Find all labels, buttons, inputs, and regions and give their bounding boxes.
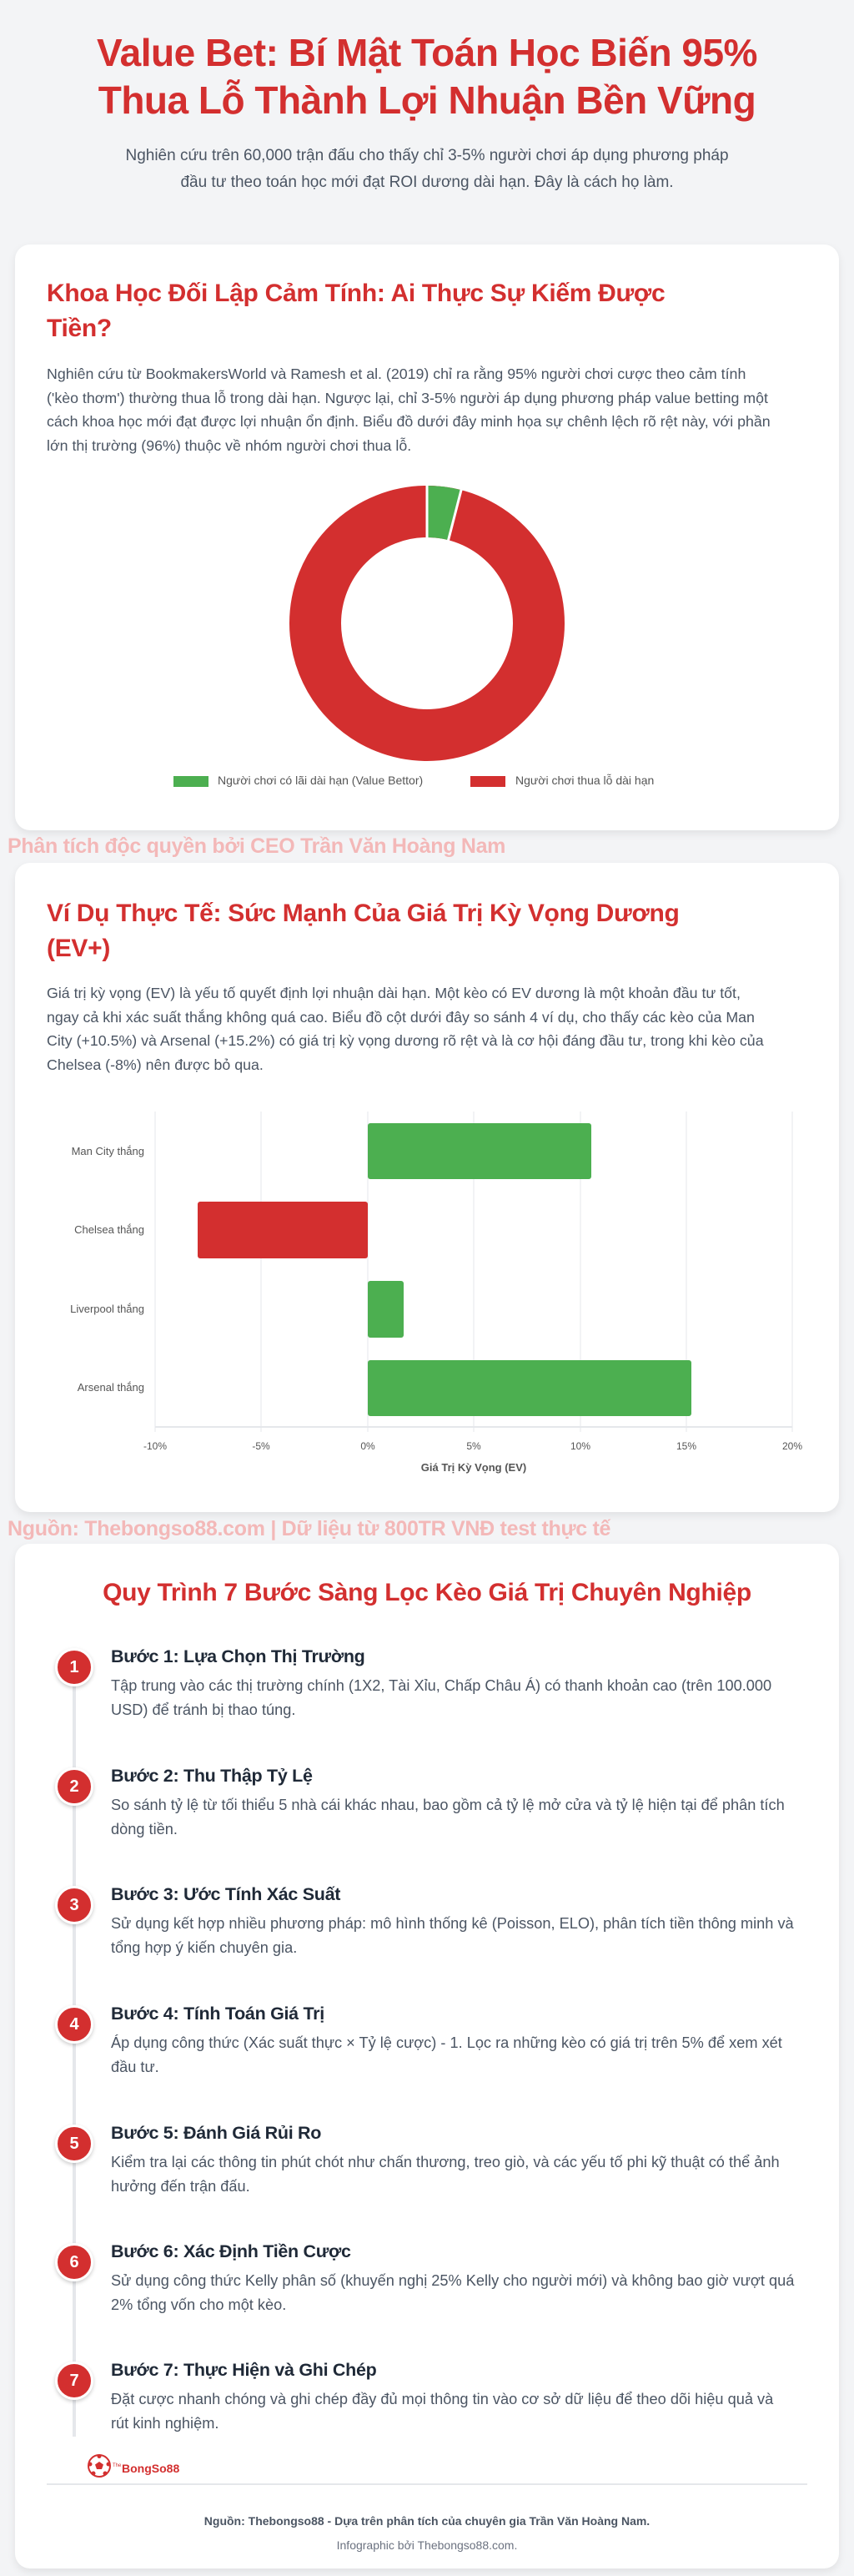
bar chart: 0% [360, 1440, 375, 1452]
step 4 [53, 2004, 782, 2075]
title: Value Bet: Bí Mật Toán Học Biến 95% [97, 31, 757, 74]
icon: logo: BongSo88 [122, 2462, 179, 2475]
text block: ('kèo thơm') thường thua lỗ trong dài hạn. Ngược lại, chỉ 3-5% người áp dụng phương pháp value betting một [47, 390, 768, 406]
bar chart: 15% [676, 1440, 696, 1452]
step 1: Bước 1: Lựa Chọn Thị Trường [111, 1646, 364, 1666]
subtitle [125, 147, 729, 191]
step 1: USD) để tránh bị thao túng. [111, 1701, 295, 1718]
bar chart: -5% [252, 1440, 270, 1452]
step 1: Tập trung vào các thị trường chính (1X2, Tài Xỉu, Chấp Châu Á) có thanh khoản cao (trên 100.000 [111, 1677, 771, 1694]
watermark 2: Nguồn: Thebongso88.com | Dữ liệu từ 800TR VNĐ test thực tế [8, 1517, 610, 1540]
bar chart: -10% [143, 1440, 167, 1452]
step 5: 5 [69, 2135, 79, 2153]
text block: City (+10.5%) và Arsenal (+15.2%) có giá trị kỳ vọng dương rõ rệt và là cơ hội đáng đầu tư, trong khi kèo của [47, 1032, 764, 1049]
text block: cách khoa học mới đạt được lợi nhuận ổn định. Biểu đồ dưới đây minh họa sự chênh lệch rõ rệt này, với phần [47, 413, 771, 430]
step 6: 2% tổng vốn cho một kèo. [111, 2296, 286, 2313]
bar chart [70, 1112, 802, 1474]
step 6 [53, 2241, 794, 2313]
heading: (EV+) [47, 935, 110, 962]
text block [47, 365, 771, 454]
step 6: Sử dụng công thức Kelly phân số (khuyến nghị 25% Kelly cho người mới) và không bao giờ vượt quá [111, 2272, 794, 2289]
bar chart: Chelsea thắng [74, 1223, 144, 1236]
text block: Giá trị kỳ vọng (EV) là yếu tố quyết định lợi nhuận dài hạn. Một kèo có EV dương là một khoản đầu tư tốt, [47, 985, 741, 1001]
subtitle: Nghiên cứu trên 60,000 trận đấu cho thấy chỉ 3-5% người chơi áp dụng phương pháp [125, 147, 729, 164]
step 7 [53, 2360, 774, 2432]
step 7: Bước 7: Thực Hiện và Ghi Chép [111, 2360, 376, 2380]
text block: ngay cả khi xác suất thắng không quá cao. Biểu đồ cột dưới đây so sánh 4 ví dụ, cho thấy các kèo của Man [47, 1009, 755, 1026]
text block: lớn thị trường (96%) thuộc về nhóm người chơi thua lỗ. [47, 437, 411, 454]
step 2: dòng tiền. [111, 1821, 178, 1837]
subtitle: đầu tư theo toán học mới đạt ROI dương dài hạn. Đây là cách họ làm. [180, 174, 674, 191]
step 3: Bước 3: Ước Tính Xác Suất [111, 1884, 340, 1904]
panel: science vs intuition [15, 244, 839, 830]
step 3: tổng hợp ý kiến chuyên gia. [111, 1939, 297, 1956]
step 3: Sử dụng kết hợp nhiều phương pháp: mô hình thống kê (Poisson, ELO), phân tích tiền thông minh và [111, 1915, 794, 1932]
legend [173, 774, 654, 787]
bar chart: Liverpool thắng [70, 1303, 144, 1315]
step 6: Bước 6: Xác Định Tiền Cược [111, 2241, 351, 2261]
footer [204, 2514, 650, 2552]
panel: 7-step process [15, 1544, 839, 2568]
step 2: 2 [69, 1777, 79, 1796]
step 5: hưởng đến trận đấu. [111, 2178, 250, 2195]
bar chart: Giá Trị Kỳ Vọng (EV) [421, 1461, 526, 1474]
step 4: Áp dụng công thức (Xác suất thực × Tỷ lệ cược) - 1. Lọc ra những kèo có giá trị trên 5% để xem xét [111, 2034, 782, 2051]
title: Thua Lỗ Thành Lợi Nhuận Bền Vững [98, 78, 756, 122]
footer: Infographic bởi Thebongso88.com. [337, 2538, 517, 2552]
step 3 [53, 1884, 794, 1956]
step 5: Kiểm tra lại các thông tin phút chót như chấn thương, treo giò, và các yếu tố phi kỹ thuật có thể ảnh [111, 2154, 780, 2170]
bar chart: 10% [570, 1440, 590, 1452]
step 2 [53, 1766, 785, 1837]
step 6: 6 [69, 2253, 79, 2271]
step 7: 7 [69, 2372, 79, 2390]
bar chart: 20% [782, 1440, 802, 1452]
text block: Chelsea (-8%) nên được bỏ qua. [47, 1056, 264, 1073]
step 4: Bước 4: Tính Toán Giá Trị [111, 2004, 324, 2024]
step 5: Bước 5: Đánh Giá Rủi Ro [111, 2123, 321, 2143]
step 1: 1 [69, 1658, 79, 1676]
step 3: 3 [69, 1896, 79, 1914]
text block: Nghiên cứu từ BookmakersWorld và Ramesh et al. (2019) chỉ ra rằng 95% người chơi cược theo cảm tính [47, 365, 746, 382]
step 4: đầu tư. [111, 2059, 159, 2075]
step 2: Bước 2: Thu Thập Tỷ Lệ [111, 1766, 313, 1786]
panel: EV example [15, 863, 839, 1512]
icon: logo [88, 2454, 179, 2478]
legend: Người chơi thua lỗ dài hạn [515, 774, 654, 787]
step 1 [53, 1646, 771, 1718]
watermark 1: Phân tích độc quyền bởi CEO Trần Văn Hoàng Nam [8, 834, 505, 858]
bar chart: Man City thắng [72, 1145, 144, 1157]
step 2: So sánh tỷ lệ từ tối thiểu 5 nhà cái khác nhau, bao gồm cả tỷ lệ mở cửa và tỷ lệ hiện tại để phân tích [111, 1797, 785, 1813]
step 5 [53, 2123, 780, 2195]
heading [47, 900, 680, 962]
step 4: 4 [69, 2015, 79, 2034]
heading: Quy Trình 7 Bước Sàng Lọc Kèo Giá Trị Chuyên Nghiệp [103, 1579, 751, 1606]
heading: Ví Dụ Thực Tế: Sức Mạnh Của Giá Trị Kỳ Vọng Dương [47, 900, 680, 927]
bar chart: 5% [466, 1440, 481, 1452]
heading [47, 280, 665, 342]
heading: Tiền? [47, 315, 112, 342]
bar chart: Arsenal thắng [78, 1381, 144, 1394]
heading: Khoa Học Đối Lập Cảm Tính: Ai Thực Sự Kiếm Được [47, 280, 665, 307]
footer: Nguồn: Thebongso88 - Dựa trên phân tích của chuyên gia Trần Văn Hoàng Nam. [204, 2514, 650, 2528]
icon: logo: The [113, 2463, 121, 2468]
step 7: Đặt cược nhanh chóng và ghi chép đầy đủ mọi thông tin vào cơ sở dữ liệu để theo dõi hiệu quả và [111, 2391, 773, 2407]
step 7: rút kinh nghiệm. [111, 2415, 219, 2432]
donut chart [289, 486, 565, 761]
text block [47, 985, 764, 1073]
title [97, 31, 757, 122]
legend: Người chơi có lãi dài hạn (Value Bettor) [218, 774, 423, 787]
